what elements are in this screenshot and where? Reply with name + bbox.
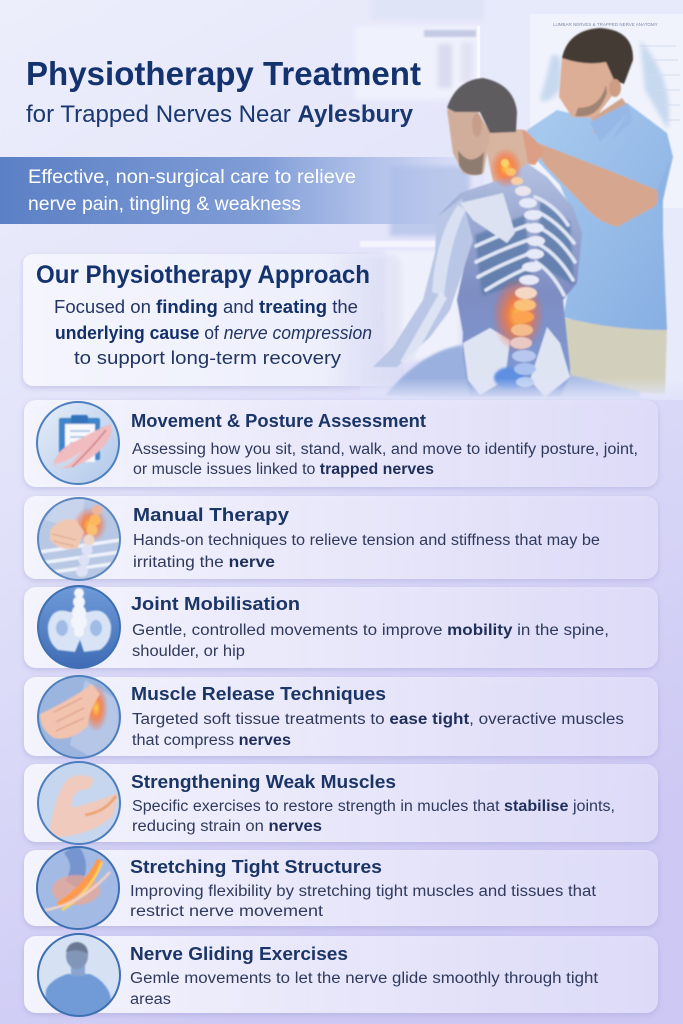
card: muscle release techniques: Targeted soft tissue treatments to ease tight , overactive muscles <box>132 711 624 728</box>
rib cage shade <box>475 200 574 296</box>
card: strengthening weak muscles: Strengthening Weak Muscles <box>131 771 396 792</box>
card: stretching tight structures <box>24 847 658 929</box>
icon: flexed arm <box>38 762 120 844</box>
panel: our physiotherapy approach <box>23 254 401 386</box>
poster <box>530 14 683 208</box>
banner <box>0 157 470 224</box>
poster: LUMBAR NERVES & TRAPPED NERVE ANATOMY <box>553 22 658 27</box>
arm <box>373 198 473 367</box>
card: muscle release techniques <box>24 676 658 760</box>
card: stretching tight structures: Stretching Tight Structures <box>130 856 382 877</box>
card: nerve gliding exercises: Gemle movements to let the nerve glide smoothly through tight <box>130 970 599 987</box>
card: movement and posture assessment: Movement & Posture Assessment <box>131 410 426 431</box>
icon: person from behind <box>38 934 120 1016</box>
torso <box>437 163 582 397</box>
card: joint mobilisation: Joint Mobilisation <box>131 593 300 614</box>
icon: pelvis <box>38 586 120 668</box>
patient body <box>373 78 640 398</box>
card: manual therapy: irritating the nerve <box>133 554 275 571</box>
therapist head <box>559 57 620 118</box>
card: joint mobilisation <box>24 586 658 668</box>
icon: hands on muscle <box>38 676 120 760</box>
card: movement and posture assessment: Assessing how you sit, stand, walk, and move to identify posture, joint, <box>132 441 638 458</box>
card: strengthening weak muscles: reducing strain on nerves <box>132 818 322 835</box>
neck and head <box>482 130 528 182</box>
card: joint mobilisation: shoulder, or hip <box>132 643 245 660</box>
spine <box>501 159 545 387</box>
illustration: therapist treating patient <box>360 28 683 400</box>
card: strengthening weak muscles: Specific exercises to restore strength in mucles that stabilise joints, <box>132 798 615 815</box>
ribs <box>476 197 575 295</box>
card: stretching tight structures: restrict nerve movement <box>130 903 324 920</box>
panel: our physiotherapy approach: Our Physiotherapy Approach <box>36 261 370 289</box>
lower body <box>385 345 470 398</box>
title: Physiotherapy Treatment <box>26 55 421 92</box>
card: nerve gliding exercises: Nerve Gliding Exercises <box>130 943 348 964</box>
banner: Effective, non-surgical care to relieve <box>28 167 356 188</box>
panel: our physiotherapy approach: Focused on finding and treating the <box>54 297 358 317</box>
icon: stretched tissues <box>37 847 119 929</box>
icon: hand on spine <box>38 498 120 580</box>
fade into page <box>360 378 683 400</box>
subtitle: for Trapped Nerves Near Aylesbury <box>26 101 414 128</box>
therapist <box>491 28 673 394</box>
card: nerve gliding exercises: areas <box>130 991 171 1008</box>
panel: our physiotherapy approach: to support long-term recovery <box>74 348 341 368</box>
glow <box>492 277 544 353</box>
card: movement and posture assessment: or muscle issues linked to trapped nerves <box>133 461 434 478</box>
card: muscle release techniques: that compress nerves <box>132 732 291 749</box>
clinic room background <box>355 0 683 400</box>
icon: clipboard and muscle <box>37 402 119 484</box>
card: strengthening weak muscles <box>24 762 658 844</box>
card: stretching tight structures: Improving flexibility by stretching tight muscles and tissues that <box>130 883 597 900</box>
therapist forearm <box>530 140 658 227</box>
scapula <box>460 193 515 243</box>
card: manual therapy <box>24 496 658 580</box>
card: nerve gliding exercises <box>24 934 658 1016</box>
panel: our physiotherapy approach: underlying cause of nerve compression <box>55 323 372 343</box>
card: manual therapy: Hands-on techniques to relieve tension and stiffness that may be <box>133 532 600 549</box>
banner: nerve pain, tingling & weakness <box>28 194 301 215</box>
card: muscle release techniques: Muscle Release Techniques <box>131 683 386 704</box>
card: joint mobilisation: Gentle, controlled movements to improve mobility in the spine, <box>132 622 609 639</box>
card: manual therapy: Manual Therapy <box>133 504 290 525</box>
card: movement and posture assessment <box>24 400 658 487</box>
pelvis <box>463 327 570 397</box>
